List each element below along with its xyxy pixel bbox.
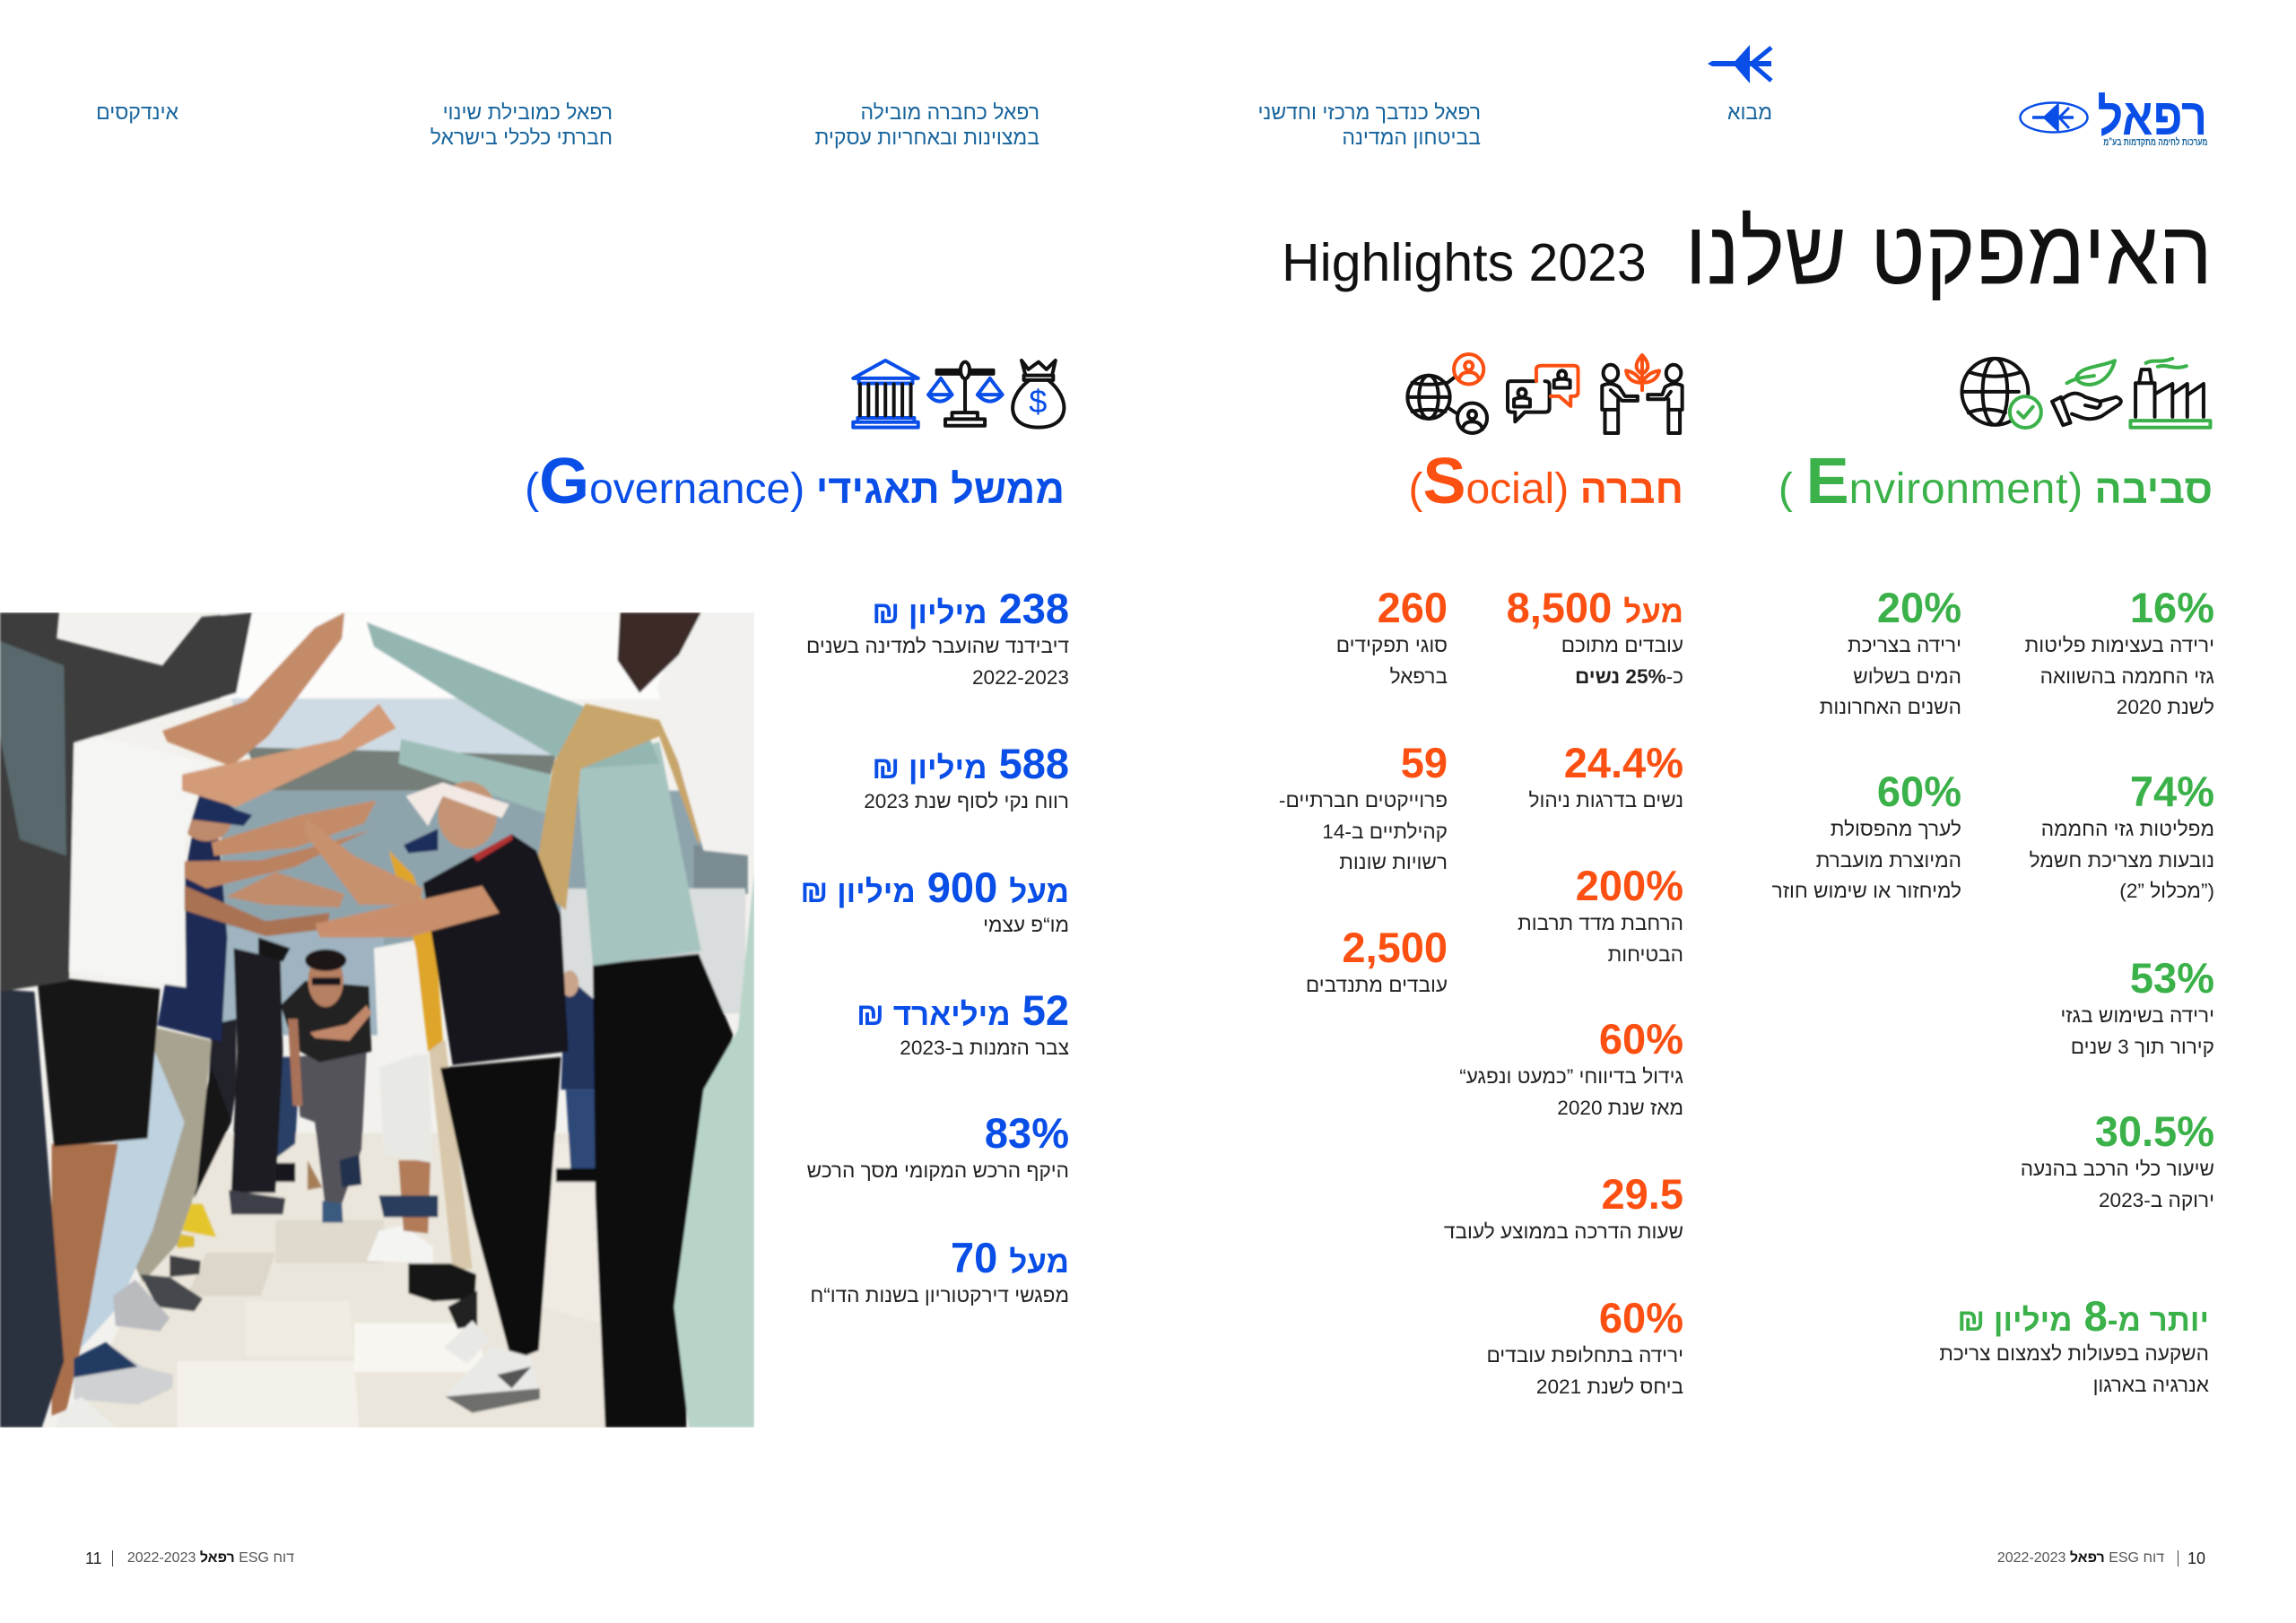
stat: scope 2: נובעות מצריכת חשמל bbox=[2030, 848, 2214, 872]
centre man bbox=[281, 950, 371, 1223]
panel: social bbox=[1279, 352, 1684, 1397]
stat: net profit bbox=[864, 740, 1069, 812]
stat: volunteers: 2,500 bbox=[1342, 924, 1448, 971]
heading: social: חברה (Social) bbox=[1408, 446, 1683, 517]
heading: environment: סביבה (Environment ) bbox=[1779, 446, 2213, 517]
stat: emissions: 16% bbox=[2130, 584, 2214, 631]
icons: governance: $ bbox=[1029, 383, 1047, 420]
page number 10: 10 bbox=[2187, 1549, 2205, 1567]
stat: local procurement: 83% bbox=[985, 1109, 1069, 1157]
stat: scope 2: 74% bbox=[2130, 768, 2214, 815]
stat: local procurement: היקף הרכש המקומי מסך הרכש bbox=[807, 1159, 1069, 1182]
background figures bbox=[206, 1019, 300, 1182]
man in white tee and shorts bbox=[37, 731, 209, 1428]
stat: board meetings bbox=[810, 1234, 1069, 1306]
navigation: intro: מבוא bbox=[1727, 100, 1772, 124]
stat: r and d bbox=[800, 864, 1069, 936]
icon: plane symbol above navigation bbox=[1708, 45, 1773, 83]
navigation: defense engine: בביטחון המדינה bbox=[1342, 126, 1481, 149]
stat: dividend: 2022-2023 bbox=[972, 665, 1069, 689]
stat: safety culture: הבטיחות bbox=[1608, 943, 1683, 965]
stat: refrigerant gases bbox=[2060, 954, 2214, 1058]
stat: training hours: 29.5 bbox=[1602, 1170, 1683, 1218]
stat: scope 2 bbox=[2030, 768, 2214, 902]
stat: green vehicles: ירוקה ב-2023 bbox=[2099, 1189, 2214, 1211]
footer: left page number bbox=[85, 1549, 294, 1567]
stat: community projects bbox=[1279, 739, 1448, 873]
navigation: defense engine bbox=[1257, 100, 1481, 149]
icons: social bbox=[1405, 352, 1684, 435]
stat: waste: למיחזור או שימוש חוזר bbox=[1772, 880, 1961, 902]
stat: dividend: דיבידנד שהועבר למדינה בשנים bbox=[806, 635, 1069, 657]
stat: waste: 60% bbox=[1877, 768, 1961, 815]
stat: refrigerant gases: ירידה בשימוש בגזי bbox=[2060, 1004, 2214, 1027]
stat: emissions: ירידה בעצימות פליטות bbox=[2025, 634, 2214, 656]
stat: emissions: לשנת 2020 bbox=[2117, 696, 2214, 718]
photo: employees forming a human tunnel bbox=[0, 612, 754, 1428]
stat: women in management: 24.4% bbox=[1564, 739, 1683, 786]
heading: governance: ממשל תאגידי (Governance) bbox=[525, 446, 1065, 517]
stat: near miss: גידול בדיווחי ”כמעט ונפגע“ bbox=[1459, 1065, 1683, 1088]
stat: turnover: ירידה בתחלופת עובדים bbox=[1486, 1344, 1683, 1367]
stat: scope 2: (”מכלול ”2) bbox=[2119, 880, 2214, 902]
woman in teal top bbox=[367, 622, 733, 1428]
stat: order backlog: צבר הזמנות ב-2023 bbox=[900, 1037, 1069, 1059]
stat: dividend bbox=[806, 585, 1069, 689]
stat: women in management: נשים בדרגות ניהול bbox=[1528, 789, 1683, 812]
stat: r and d: מו“פ עצמי bbox=[983, 914, 1069, 936]
man in black left of centre bbox=[229, 937, 291, 1214]
stat: order backlog: 52 מיליארד ₪ bbox=[857, 986, 1069, 1034]
navigation: change leader: חברתי כלכלי בישראל bbox=[430, 126, 613, 149]
stat: near miss: 60% bbox=[1599, 1015, 1683, 1063]
woman at far right bbox=[617, 612, 754, 1428]
icons: environment bbox=[1961, 357, 2212, 430]
stat: community projects: קהילתיים ב-14 bbox=[1322, 820, 1448, 843]
stat: employees: עובדים מתוכם bbox=[1561, 634, 1683, 656]
stat: board meetings: מפגשי דירקטוריון בשנות הדו“ח bbox=[810, 1284, 1069, 1306]
report name: דוח ESG רפאל 2022-2023 bbox=[1997, 1550, 2164, 1566]
stat: training hours bbox=[1444, 1170, 1683, 1243]
logo tagline: מערכות לחימה מתקדמות בע"מ bbox=[2103, 137, 2207, 148]
navigation: defense engine: רפאל כנדבך מרכזי וחדשני bbox=[1257, 100, 1481, 124]
stat: employees: כ-25% נשים bbox=[1575, 665, 1683, 687]
stat: refrigerant gases: 53% bbox=[2130, 954, 2214, 1002]
stat: safety culture bbox=[1518, 862, 1683, 965]
navigation: change leader bbox=[430, 100, 613, 149]
stat: volunteers: עובדים מתנדבים bbox=[1306, 974, 1448, 996]
stat: job types: ברפאל bbox=[1390, 665, 1448, 687]
icon: logo emblem bbox=[2019, 101, 2089, 134]
stat: turnover: 60% bbox=[1599, 1294, 1683, 1341]
stat: job types: 260 bbox=[1378, 584, 1448, 631]
navigation: leading company: רפאל כחברה מובילה bbox=[860, 100, 1039, 124]
stat: water: ירידה בצריכת bbox=[1848, 634, 1961, 656]
stat: waste bbox=[1772, 768, 1961, 902]
stat: near miss: מאז שנת 2020 bbox=[1557, 1096, 1683, 1119]
navigation: index: אינדקסים bbox=[96, 100, 178, 124]
stat: energy investment bbox=[1939, 1292, 2209, 1395]
stat: local procurement bbox=[807, 1109, 1069, 1182]
stat: turnover bbox=[1486, 1294, 1683, 1397]
stat: near miss bbox=[1459, 1015, 1683, 1119]
navigation: change leader: רפאל כמובילת שינוי bbox=[443, 100, 613, 124]
man at far left bbox=[0, 612, 252, 1428]
stat: emissions: גזי החממה בהשוואה bbox=[2040, 665, 2214, 687]
stat: dividend: 238 מיליון ₪ bbox=[872, 585, 1069, 632]
stat: water: השנים האחרונות bbox=[1820, 696, 1961, 718]
stat: community projects: 59 bbox=[1401, 739, 1448, 786]
stat: net profit: 588 מיליון ₪ bbox=[872, 740, 1069, 787]
stat: order backlog bbox=[857, 986, 1069, 1059]
stat: training hours: שעות הדרכה בממוצע לעובד bbox=[1444, 1220, 1683, 1243]
stat: safety culture: 200% bbox=[1576, 862, 1683, 909]
stat: energy investment: יותר מ-8 מיליון ₪ bbox=[1957, 1292, 2209, 1340]
stat: refrigerant gases: קירור תוך 3 שנים bbox=[2071, 1035, 2214, 1058]
icons: governance bbox=[851, 359, 1065, 430]
stat: energy investment: השקעה בפעולות לצמצום צריכת bbox=[1939, 1342, 2209, 1365]
stat: water: 20% bbox=[1877, 584, 1961, 631]
stat: women in management bbox=[1528, 739, 1683, 812]
stat: community projects: רשויות שונות bbox=[1339, 851, 1448, 873]
stat: volunteers bbox=[1306, 924, 1448, 996]
stat: scope 2: מפליטות גזי החממה bbox=[2041, 818, 2214, 840]
stat: r and d: מעל 900 מיליון ₪ bbox=[800, 864, 1069, 911]
man in navy and khaki bbox=[135, 791, 252, 1311]
stat: emissions bbox=[2025, 584, 2214, 718]
stat: net profit: רווח נקי לסוף שנת 2023 bbox=[864, 790, 1069, 812]
stat: job types bbox=[1336, 584, 1448, 687]
man in white and yellow bbox=[367, 850, 473, 1269]
stat: employees: מעל 8,500 bbox=[1507, 584, 1683, 631]
subtitle: Highlights 2023: Highlights 2023 bbox=[1282, 233, 1647, 292]
stat: green vehicles: 30.5% bbox=[2095, 1107, 2214, 1155]
page number 11: 11 bbox=[85, 1549, 102, 1567]
logo wordmark: רפאל bbox=[2097, 88, 2207, 146]
report name: דוח ESG רפאל 2022-2023 bbox=[127, 1550, 294, 1566]
stat: water bbox=[1820, 584, 1961, 718]
stat: waste: המיוצרת מועברת bbox=[1816, 848, 1961, 872]
stat: community projects: פרוייקטים חברתיים- bbox=[1279, 789, 1448, 812]
stat: job types: סוגי תפקידים bbox=[1336, 634, 1448, 656]
background man right bbox=[556, 970, 603, 1182]
panel: environment bbox=[1772, 357, 2214, 1395]
footer: right page number bbox=[1998, 1549, 2206, 1568]
panel: governance bbox=[525, 359, 1069, 1306]
stat: waste: לערך מהפסולת bbox=[1831, 818, 1961, 840]
raised arms left side bbox=[162, 612, 396, 936]
stat: water: המים בשלוש bbox=[1853, 665, 1961, 687]
title: our impact: האימפקט שלנו bbox=[1685, 203, 2213, 303]
navigation: leading company: במצוינות ובאחריות עסקית bbox=[814, 126, 1039, 149]
stat: employees bbox=[1507, 584, 1683, 687]
stat: energy investment: אנרגיה בארגון bbox=[2093, 1374, 2209, 1395]
stat: green vehicles: שיעור כלי הרכב בהנעה bbox=[2021, 1158, 2214, 1180]
logo: Rafael bbox=[2019, 88, 2207, 148]
stat: green vehicles bbox=[2021, 1107, 2214, 1211]
navigation: leading company bbox=[814, 100, 1039, 149]
man in black polo bbox=[305, 781, 569, 1413]
stat: safety culture: הרחבת מדד תרבות bbox=[1518, 912, 1683, 934]
stat: board meetings: מעל 70 bbox=[951, 1234, 1069, 1281]
stat: turnover: ביחס לשנת 2021 bbox=[1536, 1376, 1683, 1397]
